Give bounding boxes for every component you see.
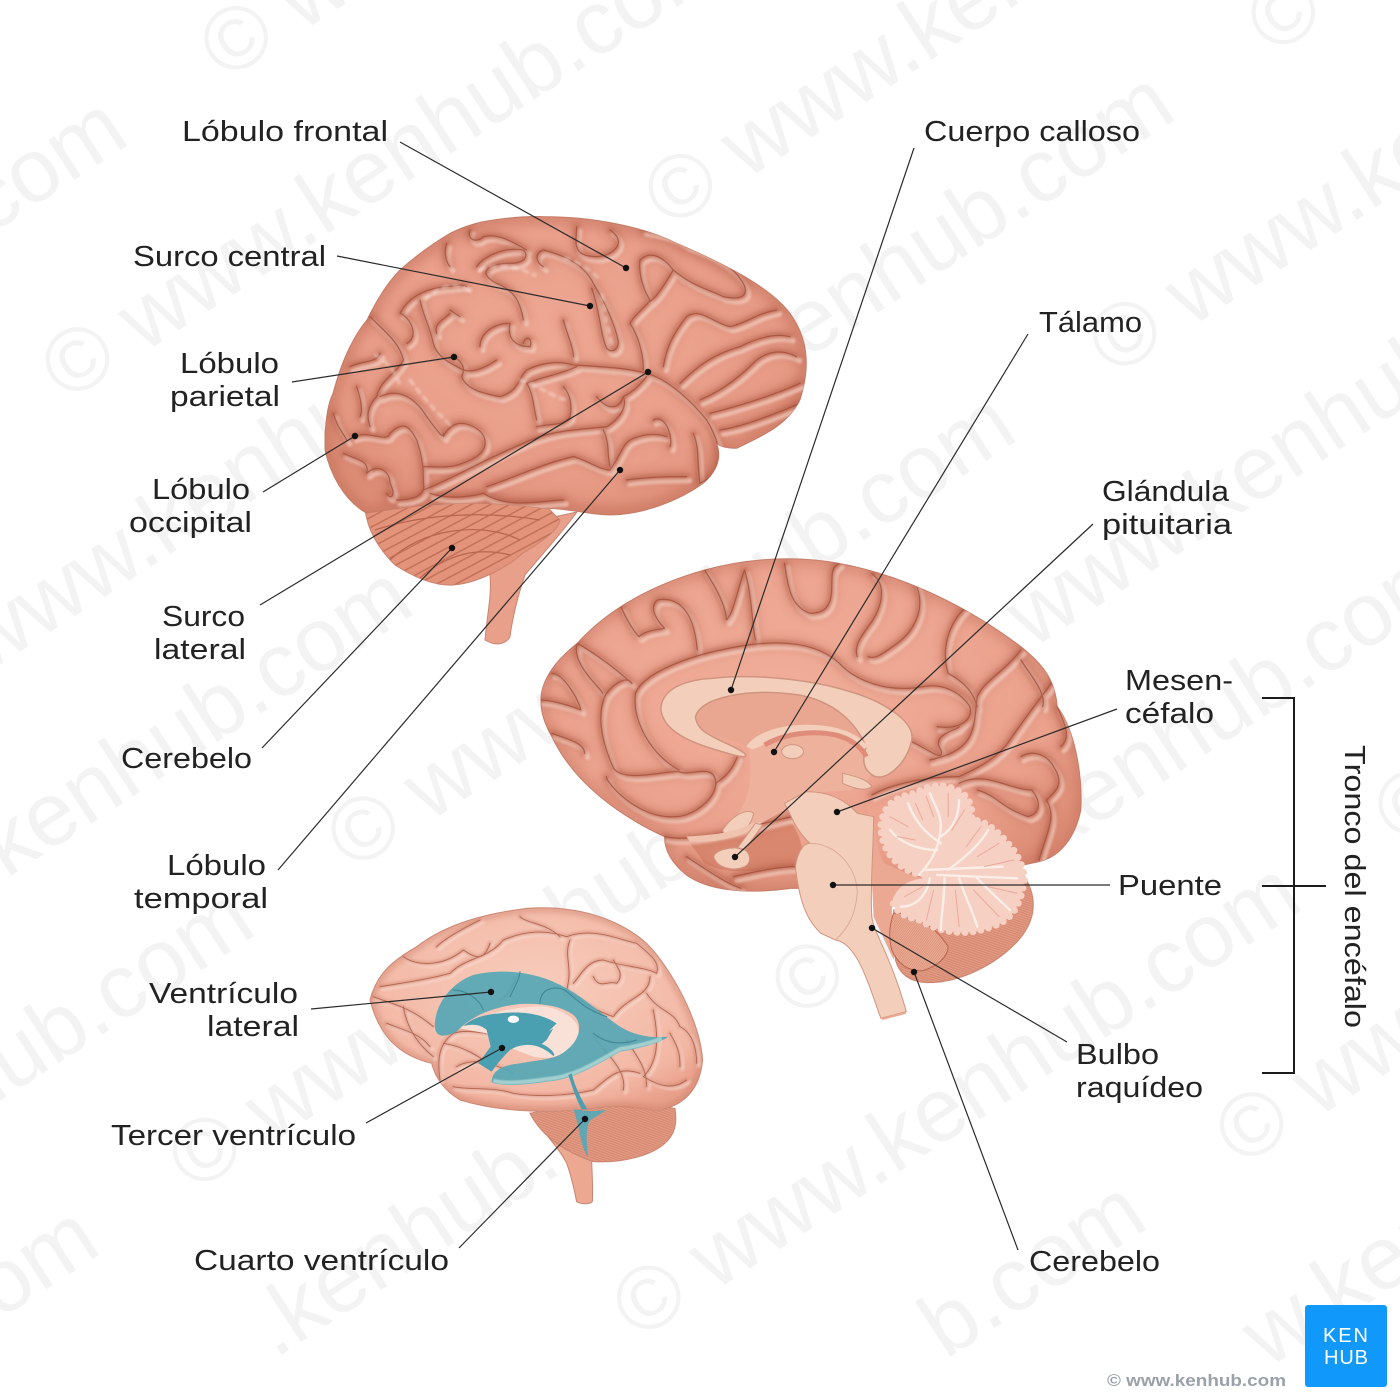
label: Lóbulo occipital bbox=[129, 474, 252, 539]
label: Lóbulo temporal: Lóbulo bbox=[167, 850, 266, 882]
leader: Lóbulo temporal bbox=[278, 467, 623, 870]
leader: Glándula pituitaria bbox=[732, 524, 1093, 860]
pons contour bbox=[810, 843, 857, 940]
leader: Lóbulo occipital bbox=[263, 433, 358, 492]
logo: Kenhub: KEN bbox=[1323, 1325, 1368, 1347]
label: Cuarto ventrículo: Cuarto ventrículo bbox=[194, 1245, 449, 1277]
label: Cuerpo calloso: Cuerpo calloso bbox=[924, 116, 1140, 148]
cerebrum bbox=[325, 216, 806, 515]
label: Glándula pituitaria bbox=[1102, 476, 1233, 541]
brainstem bbox=[485, 512, 577, 644]
illustration: medial sagittal section of the brain bbox=[541, 559, 1081, 1020]
label: Tronco del encéfalo: Tronco del encéfalo bbox=[1338, 745, 1370, 1028]
brainstem: midbrain, pons, medulla bbox=[785, 792, 906, 1018]
label: Surco lateral bbox=[154, 601, 246, 666]
label: Bulbo raquídeo bbox=[1076, 1039, 1203, 1104]
arbor vitae bbox=[881, 786, 1024, 932]
label: Glándula pituitaria: pituitaria bbox=[1102, 509, 1233, 541]
label: Mesencéfalo: Mesen- bbox=[1125, 665, 1233, 697]
third ventricle bbox=[463, 1013, 557, 1072]
corpus callosum bbox=[661, 677, 912, 777]
leader: Bulbo raquídeo bbox=[869, 925, 1067, 1042]
fornix and mammillary pale structures bbox=[746, 725, 868, 750]
label: Lóbulo parietal: Lóbulo bbox=[180, 348, 279, 380]
bracket: Tronco del encéfalo bbox=[1262, 698, 1326, 1073]
brainstem small bbox=[530, 1113, 593, 1204]
leader: Cerebelo (medial) bbox=[911, 969, 1018, 1250]
leader: Lóbulo parietal bbox=[292, 354, 457, 382]
pineal region bbox=[843, 773, 872, 789]
watermark: kenhub repeating diagonal text: .kenhub.com bbox=[231, 1011, 718, 1376]
label: Bulbo raquídeo: raquídeo bbox=[1076, 1072, 1203, 1104]
optic chiasm bbox=[723, 811, 754, 835]
ventricle veins bbox=[453, 972, 637, 1043]
thalamus adhesion bbox=[782, 745, 803, 759]
copyright: www.kenhub.com: © www.kenhub.com bbox=[1107, 1371, 1286, 1390]
cerebellum bbox=[365, 498, 560, 585]
label: Surco lateral: Surco bbox=[162, 601, 245, 633]
leader lines and points bbox=[260, 142, 1117, 1250]
cerebellum small bbox=[530, 1100, 676, 1162]
fourth ventricle bbox=[573, 1109, 607, 1157]
cerebrum medial surface bbox=[541, 559, 1081, 892]
label: Puente: Puente bbox=[1118, 870, 1222, 902]
label: Lóbulo frontal: Lóbulo frontal bbox=[182, 116, 388, 148]
label: Lóbulo occipital: occipital bbox=[129, 507, 252, 539]
label: Surco lateral: lateral bbox=[154, 634, 246, 666]
label: Cerebelo: Cerebelo bbox=[121, 743, 252, 775]
choroid plexus bbox=[765, 733, 866, 757]
striped cerebellum hemisphere bbox=[894, 877, 1033, 983]
watermark: kenhub repeating diagonal text: b.com bbox=[902, 1159, 1162, 1377]
label: Cerebelo: Cerebelo bbox=[1029, 1246, 1160, 1278]
illustration: lateral view of the brain bbox=[325, 216, 806, 644]
leader: Lóbulo frontal bbox=[400, 142, 629, 271]
label: Glándula pituitaria: Glándula bbox=[1102, 476, 1230, 508]
watermark: kenhub repeating diagonal text: © www.kenhub.com bbox=[594, 840, 1317, 1358]
label: Ventrículo lateral: lateral bbox=[207, 1011, 299, 1043]
label: Lóbulo parietal bbox=[170, 348, 280, 413]
illustration: lateral brain with ventricles bbox=[370, 908, 703, 1204]
diencephalon bbox=[723, 727, 873, 833]
label: Lóbulo temporal bbox=[134, 850, 268, 915]
fourth ventricle tissue bbox=[868, 803, 923, 960]
label: Lóbulo occipital: Lóbulo bbox=[152, 474, 250, 506]
leader: Puente bbox=[830, 882, 1110, 888]
leader: Surco central bbox=[337, 256, 593, 309]
logo: Kenhub: HUB bbox=[1324, 1347, 1368, 1369]
leader: Tálamo bbox=[771, 334, 1028, 755]
leader: Mesencéfalo bbox=[834, 709, 1117, 815]
label: Ventrículo lateral bbox=[149, 978, 299, 1043]
leader: Tercer ventrículo bbox=[366, 1045, 505, 1123]
logo: Kenhub bbox=[1305, 1305, 1387, 1387]
lateral ventricle bbox=[435, 972, 668, 1085]
ventricle lower fringe bbox=[493, 1039, 662, 1082]
interthalamic opening bbox=[508, 1016, 519, 1023]
gyri highlights bbox=[375, 258, 612, 425]
pituitary gland bbox=[714, 823, 763, 869]
leader: Ventrículo lateral bbox=[311, 989, 494, 1009]
watermark: kenhub repeating diagonal text: © www.kenhub.com bbox=[309, 371, 1031, 889]
cerebellar tonsil bbox=[890, 913, 948, 971]
label: Mesencéfalo bbox=[1125, 665, 1233, 730]
label: Tercer ventrículo: Tercer ventrículo bbox=[111, 1120, 356, 1152]
inner pale gap bbox=[460, 1006, 579, 1058]
label: Bulbo raquídeo: Bulbo bbox=[1076, 1039, 1159, 1071]
cerebral aqueduct bbox=[568, 1073, 587, 1109]
label: Mesencéfalo: céfalo bbox=[1125, 698, 1214, 730]
leader: Cuerpo calloso bbox=[728, 148, 914, 693]
watermark: kenhub repeating diagonal text: © www.kenhub.com bbox=[467, 50, 1190, 568]
temporal pole dark area bbox=[690, 823, 802, 871]
leader: Surco lateral bbox=[260, 369, 651, 605]
label: Surco central: Surco central bbox=[133, 241, 326, 273]
septum inner region bbox=[695, 693, 868, 747]
label: Lóbulo temporal: temporal bbox=[134, 883, 268, 915]
label: Lóbulo parietal: parietal bbox=[170, 381, 280, 413]
cerebrum small bbox=[370, 908, 703, 1111]
leader: Cerebelo (lateral) bbox=[262, 545, 455, 748]
leader: Cuarto ventrículo bbox=[459, 1116, 588, 1248]
watermark: kenhub repeating diagonal text: © www.kenhub.com bbox=[150, 693, 873, 1210]
medulla cut face bbox=[881, 1012, 906, 1020]
label: Tálamo: Tálamo bbox=[1039, 307, 1142, 339]
label: Ventrículo lateral: Ventrículo bbox=[149, 978, 298, 1010]
